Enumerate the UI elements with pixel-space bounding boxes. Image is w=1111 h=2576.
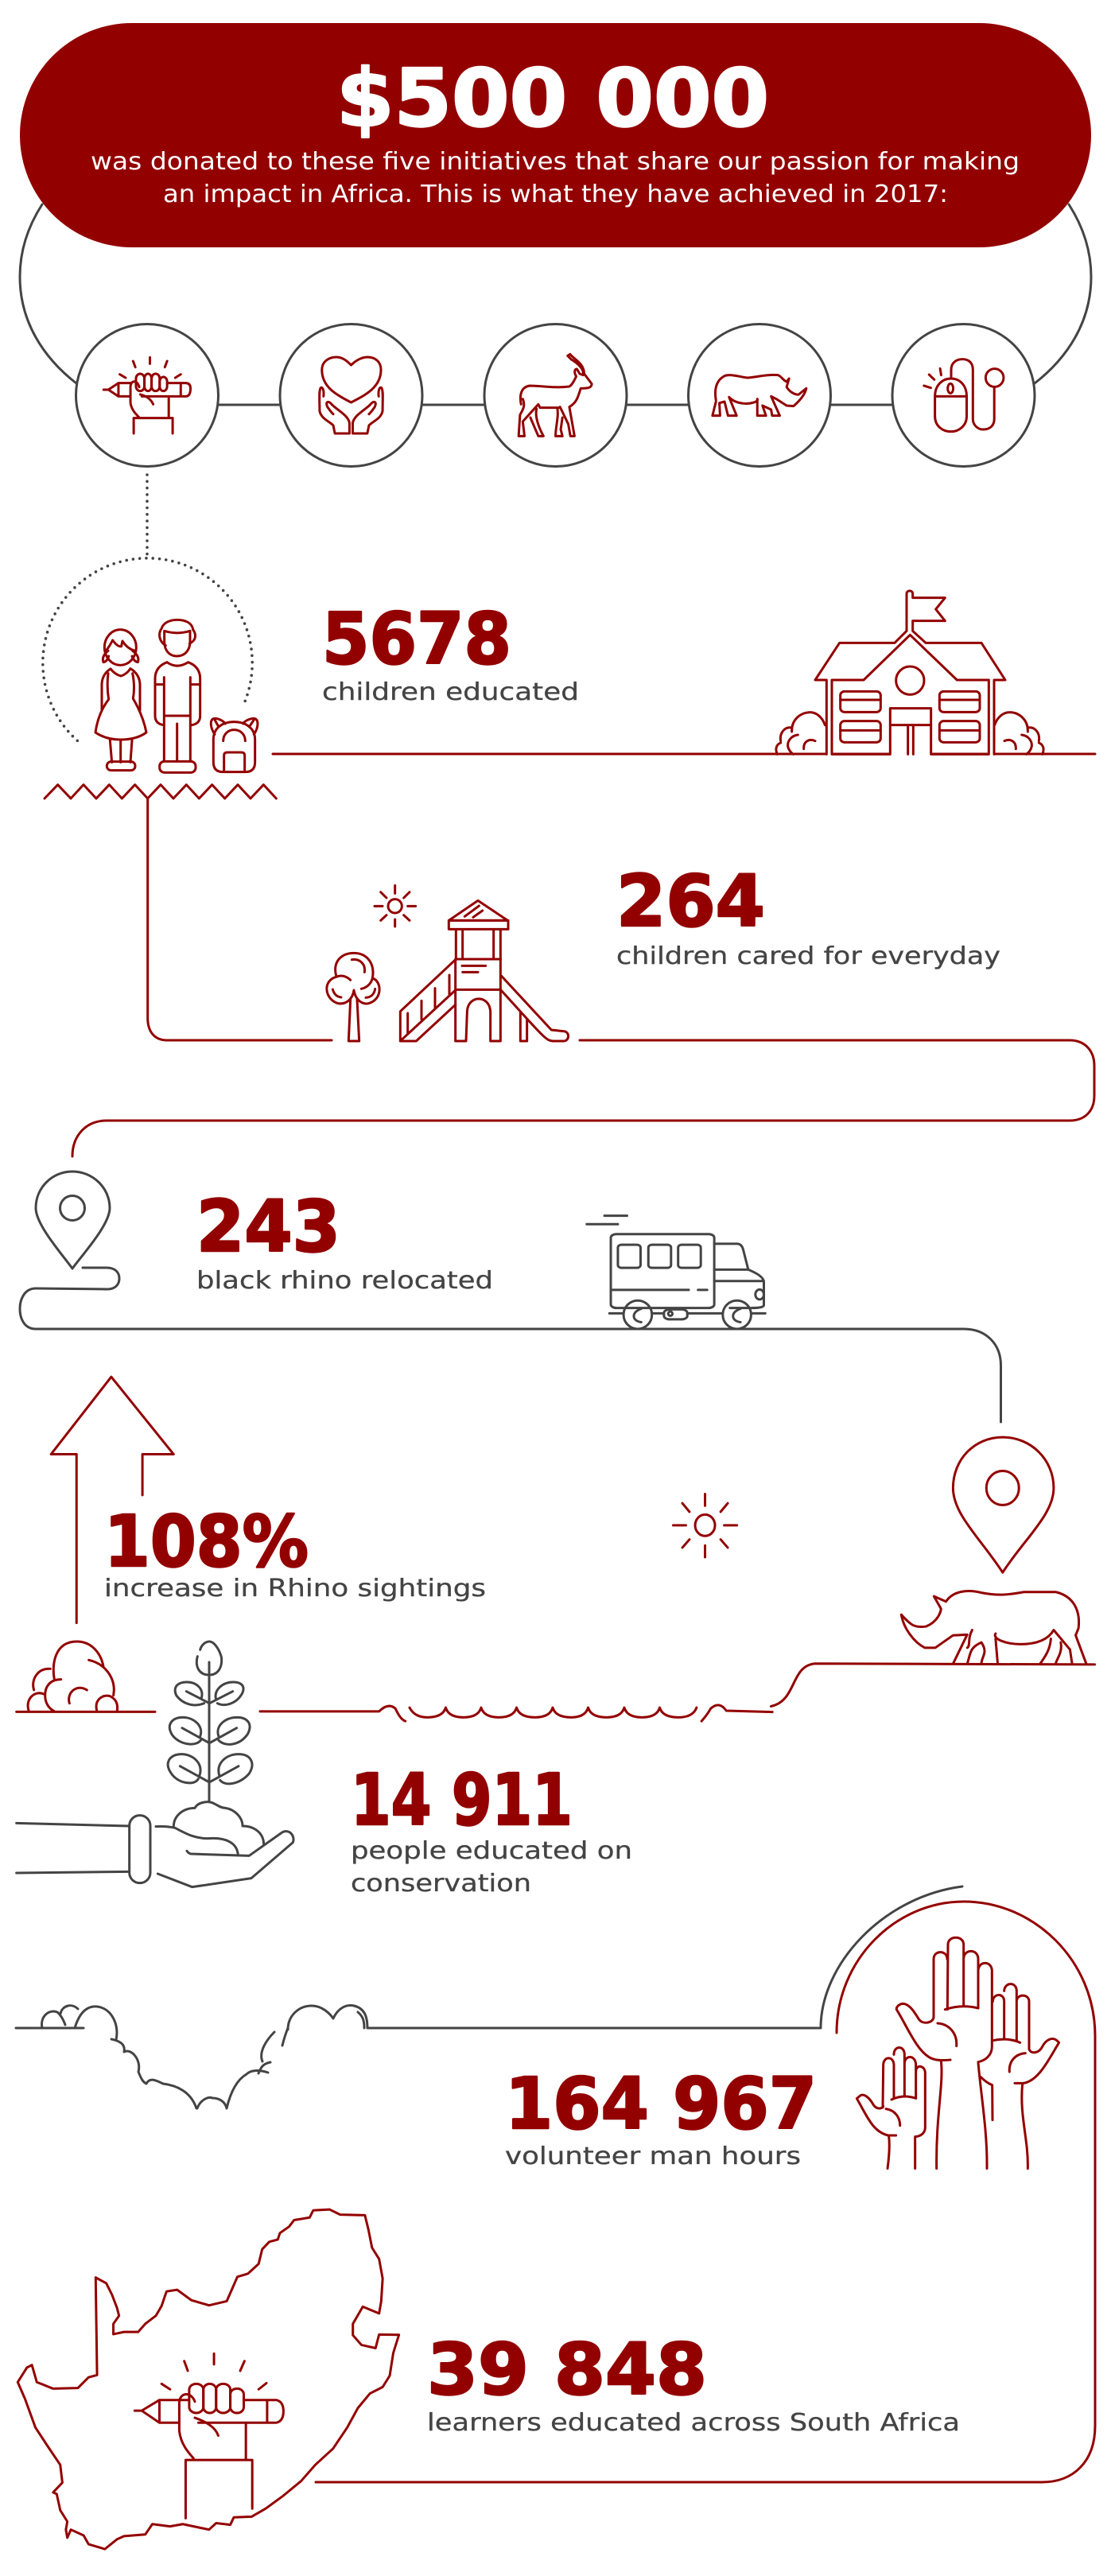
stat: people educated on conservation: people educated on: [351, 1837, 632, 1865]
tree: [327, 953, 379, 1041]
right hand: [981, 1984, 1059, 2169]
icon: bush: [17, 1642, 155, 1712]
zigzag ground: [45, 785, 276, 798]
backpack: [211, 718, 258, 772]
stat: black rhino relocated: 243: [196, 1185, 340, 1268]
stat: black rhino relocated: [196, 1185, 493, 1295]
dotted connector and halo: [43, 475, 252, 740]
arrow: increase: [51, 1377, 173, 1623]
stat: increase in rhino sightings: [104, 1500, 486, 1603]
stat: children cared for: children cared for everyday: [616, 942, 1000, 970]
icon: sun: [673, 1494, 737, 1557]
icon: location pin grey: [36, 1171, 110, 1269]
sun: [375, 885, 416, 927]
small hand: [857, 2048, 925, 2169]
map of South Africa: [17, 2209, 399, 2549]
stat: children educated: 5678: [322, 597, 511, 680]
plant: [168, 1642, 264, 1844]
grey road route: [20, 1268, 1000, 1422]
ground line under school: [273, 752, 1095, 756]
stat: volunteer man hours: volunteer man hours: [505, 2143, 801, 2170]
icon: gazelle: [519, 354, 592, 436]
red route from children to playground and onward: [72, 798, 1094, 1156]
icon: computer mouse: [924, 359, 1004, 432]
stat: learners educated: [427, 2328, 960, 2437]
stat: learners educated: 39 848: [427, 2328, 707, 2411]
stat: increase in rhino sightings: 108%: [104, 1500, 309, 1583]
header banner: [20, 23, 1091, 247]
stat: learners educated: learners educated across South Africa: [427, 2409, 960, 2437]
stat: black rhino relocated: black rhino relocated: [196, 1267, 493, 1295]
slide tower: [400, 900, 569, 1041]
header text line two: an impact in Africa. This is what they have achieved in 2017:: [163, 181, 948, 208]
big hand: [896, 1937, 992, 2169]
icon: children and backpack: [95, 620, 258, 772]
red arch route around hands: [316, 1902, 1095, 2482]
hand: [17, 1816, 293, 1887]
icon: school: [776, 591, 1043, 754]
stat: people educated on conservation: [351, 1758, 632, 1898]
stat: children educated: [322, 597, 579, 706]
girl: [95, 630, 146, 771]
stat: children educated: children educated: [322, 678, 579, 706]
icon: rhino: [713, 375, 806, 416]
header text line one: was donated to these five initiatives that share our passion for making: [91, 148, 1020, 176]
icon: raised hands: [857, 1937, 1059, 2169]
icon: fist with pencil on map: [134, 2353, 283, 2518]
icon: hand holding plant: [17, 1642, 293, 1887]
red ground with water waves: [260, 1664, 1095, 1721]
icon: playground: [327, 885, 569, 1041]
stat: increase in rhino sightings: increase in Rhino sightings: [104, 1575, 486, 1603]
icon: transport truck: [587, 1216, 765, 1329]
icon: large rhino: [901, 1591, 1086, 1664]
grey ground with valley and arch: [16, 1886, 962, 2108]
stat: children cared for: [616, 860, 1000, 970]
icon: location pin red: [953, 1437, 1054, 1572]
stat: people educated on conservation: 14 911: [351, 1758, 573, 1841]
row of five initiative circles: [76, 324, 1035, 466]
stat: people educated on conservation: conservation: [351, 1870, 531, 1898]
icon: hands holding heart: [320, 357, 383, 433]
large grey arc behind header: [20, 204, 1091, 383]
stat: volunteer man hours: 164 967: [505, 2062, 817, 2145]
boy: [155, 620, 200, 772]
stat: children cared for: 264: [616, 860, 765, 942]
icon: fist holding pencil: [103, 357, 191, 433]
title amount: $500 000: [336, 52, 769, 145]
